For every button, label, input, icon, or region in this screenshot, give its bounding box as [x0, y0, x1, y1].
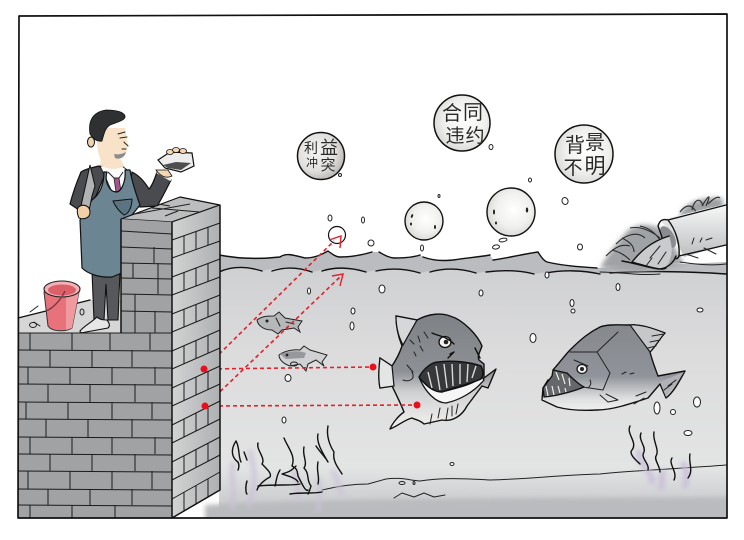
seaweed right	[629, 426, 691, 490]
bubble: unclear background: 不	[563, 158, 583, 179]
red anchor dots	[200, 364, 420, 410]
brick wall	[18, 197, 220, 518]
sea floor	[322, 465, 726, 498]
small fish one	[257, 312, 302, 334]
bubble: breach of contract: 合	[442, 102, 462, 125]
water	[205, 251, 740, 525]
droplets	[282, 144, 703, 466]
bubble: conflict of interest: 突	[320, 157, 336, 174]
bubble: breach of contract: 同	[463, 102, 483, 124]
bubble: unclear background: 明	[584, 155, 606, 178]
red bucket	[44, 281, 80, 331]
bubble: unclear background: 景	[585, 132, 605, 154]
bubble: breach of contract: 违	[445, 125, 465, 147]
bubble: unclear background	[555, 125, 613, 183]
piranha left	[379, 314, 496, 429]
platform top	[18, 300, 125, 333]
man with trowel and brick	[70, 110, 194, 333]
bubble: conflict of interest: 冲	[306, 155, 318, 170]
empty rising bubbles	[328, 188, 535, 244]
small fish two	[279, 346, 327, 371]
drain pipe and grass	[600, 197, 726, 275]
seaweed left	[232, 426, 344, 512]
dashed red lines	[204, 236, 416, 406]
bubble: conflict of interest: 益	[320, 138, 338, 158]
bubble: breach of contract	[434, 95, 490, 151]
piranha right	[542, 325, 685, 410]
bubble: conflict of interest: 利	[304, 140, 318, 156]
bubble: breach of contract: 约	[465, 125, 485, 147]
bubble: unclear background: 背	[565, 134, 585, 157]
bubble: conflict of interest	[298, 132, 344, 180]
